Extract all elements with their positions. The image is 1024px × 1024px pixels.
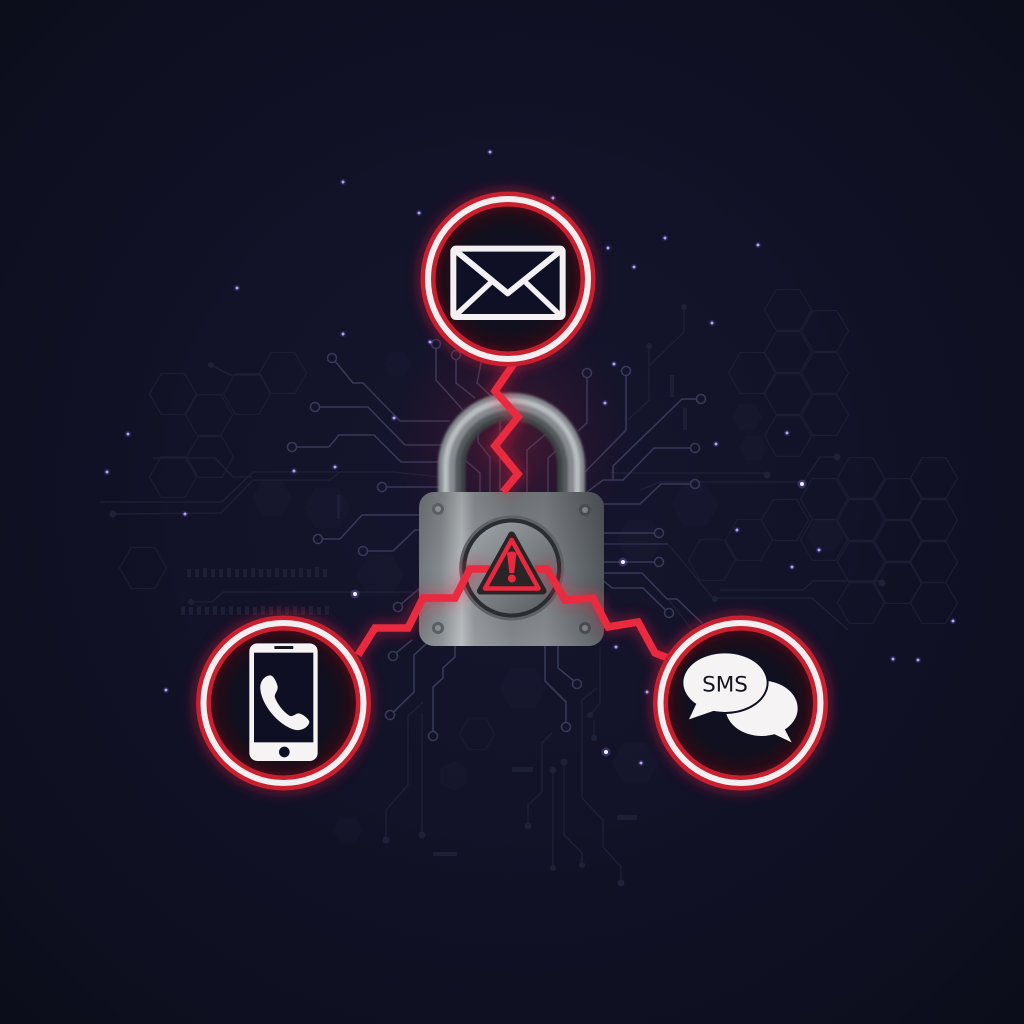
phone channel ring xyxy=(200,619,368,787)
crack from phone to lock xyxy=(358,569,490,655)
label: SMS: SMS xyxy=(702,672,748,698)
SMS channel ring xyxy=(656,619,824,787)
hexagon grid: right clusters xyxy=(459,290,958,749)
icon: chat bubbles xyxy=(681,651,798,742)
circuit traces: left of lock xyxy=(288,354,450,612)
warning triangle icon xyxy=(480,535,543,591)
circuit traces: above lock xyxy=(432,328,557,492)
faint trace terminals xyxy=(110,304,886,886)
email channel ring xyxy=(424,195,592,363)
particle dots xyxy=(104,149,956,766)
infographic scene xyxy=(100,148,958,886)
glow behind lock xyxy=(390,310,630,570)
rivets xyxy=(432,503,591,634)
hexagon grid: left cluster xyxy=(120,353,306,588)
crack from SMS to lock xyxy=(535,569,668,658)
padlock xyxy=(419,396,604,646)
icon: envelope xyxy=(453,249,563,317)
lock shackle xyxy=(442,396,582,495)
faint bar patterns xyxy=(181,375,687,856)
lock body xyxy=(419,492,604,646)
crack from email to shackle xyxy=(495,362,518,492)
circuit traces: below lock xyxy=(386,640,582,740)
circuit traces: right of lock xyxy=(578,366,706,623)
dial xyxy=(459,516,564,620)
faint filled hexagons xyxy=(252,352,844,843)
icon: smartphone xyxy=(249,643,318,761)
crack glow xyxy=(358,362,668,658)
faint circuit traces xyxy=(100,307,882,883)
